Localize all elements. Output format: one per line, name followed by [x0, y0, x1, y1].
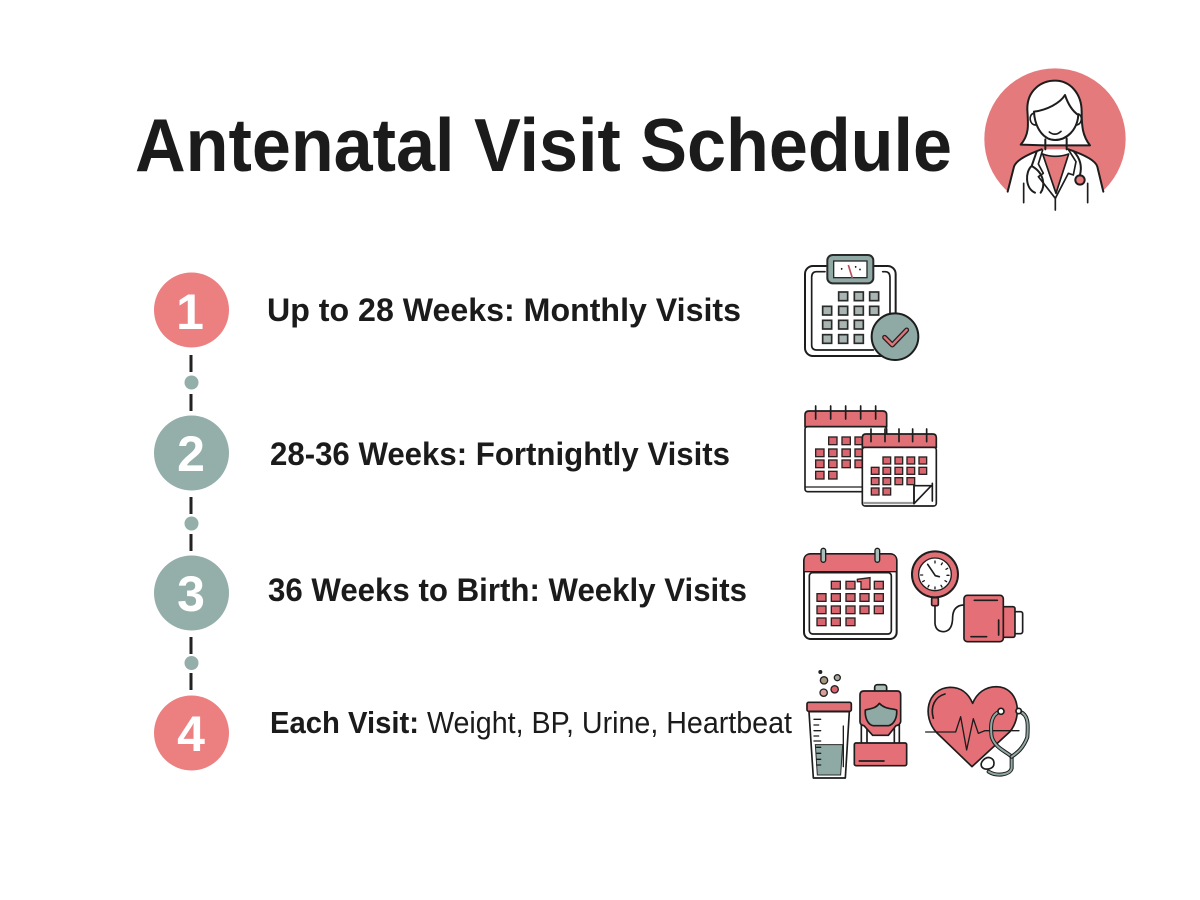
step 4 badge: [154, 696, 229, 770]
step 1 text: Up to 28 Weeks: Monthly Visits: [267, 292, 741, 328]
icon: doctor avatar: [984, 68, 1126, 217]
step 1 badge: 1: [176, 284, 204, 340]
icon: calendar with scale and check: [805, 255, 918, 360]
icon: heart with stethoscope: [926, 687, 1028, 775]
timeline connector 3 to 4: [184, 637, 198, 690]
step 2 badge: [154, 416, 229, 490]
step 4 text: Each Visit:: [270, 705, 419, 740]
timeline connector 1 to 2: [184, 355, 198, 411]
step 2 text: 28-36 Weeks: Fortnightly Visits: [270, 436, 730, 472]
icon: two overlapping calendars: [805, 406, 936, 506]
step 3 badge: [154, 556, 229, 630]
step 4 badge: 4: [177, 706, 205, 762]
step 1 badge: [154, 272, 229, 348]
step 4 text: Weight, BP, Urine, Heartbeat: [427, 705, 792, 740]
timeline connector 2 to 3: [184, 497, 198, 551]
icon: urine cup and weighing scale: [807, 670, 907, 778]
title: Antenatal Visit Schedule: [135, 103, 952, 187]
step 3 badge: 3: [177, 566, 205, 622]
icon: calendar and blood pressure monitor: [804, 548, 1023, 642]
step 3 text: 36 Weeks to Birth: Weekly Visits: [268, 572, 747, 608]
step 4 text: [270, 705, 792, 740]
step 2 badge: 2: [177, 426, 205, 482]
